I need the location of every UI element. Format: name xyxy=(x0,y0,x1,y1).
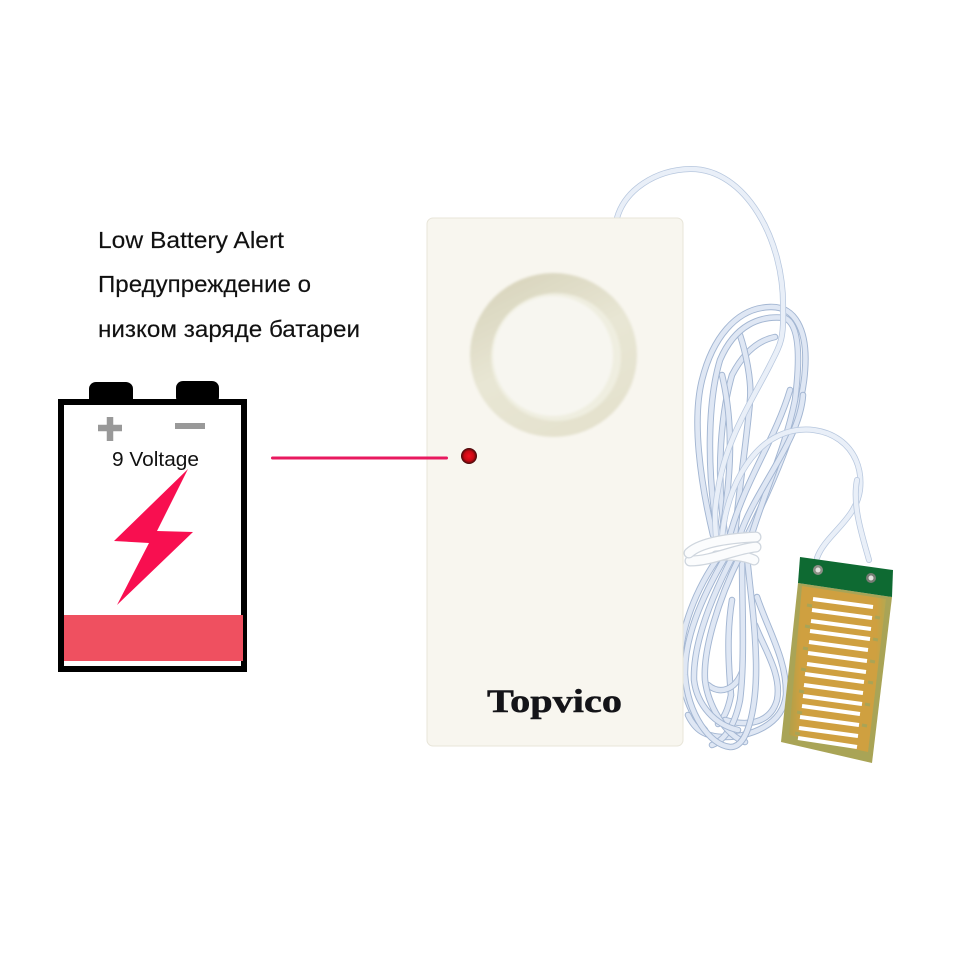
icon: lightning bolt xyxy=(114,469,193,605)
heading: low battery alert: Low Battery Alert xyxy=(98,227,284,253)
heading: low battery alert xyxy=(98,227,360,342)
LED indicator xyxy=(461,448,477,464)
cable: lower wire bundle xyxy=(680,555,786,747)
gold circuit board xyxy=(781,583,892,763)
device: alarm body xyxy=(427,218,683,746)
battery terminals xyxy=(89,381,219,406)
low charge level bar xyxy=(64,615,243,661)
brand name: Topvico xyxy=(487,684,622,720)
comb teeth gaps xyxy=(795,605,880,734)
cable: main wire from alarm xyxy=(617,169,783,538)
sensor slots xyxy=(798,599,873,747)
speaker ring xyxy=(470,273,637,437)
cable: upper wire bundle xyxy=(698,307,805,540)
minus sign xyxy=(175,423,205,429)
water sensor board xyxy=(781,557,893,763)
icon: battery xyxy=(61,381,244,669)
heading: low battery alert: Предупреждение о xyxy=(98,271,311,297)
green solder mask xyxy=(798,557,893,597)
pointer line from battery to LED xyxy=(271,456,448,460)
cable: sensor wire loop xyxy=(722,430,869,560)
voltage label: 9 Voltage xyxy=(112,448,199,471)
cable knot xyxy=(689,537,756,561)
plus sign xyxy=(98,417,122,441)
battery casing xyxy=(61,402,244,669)
heading: low battery alert: низком заряде батареи xyxy=(98,316,360,342)
solder points xyxy=(813,565,876,583)
